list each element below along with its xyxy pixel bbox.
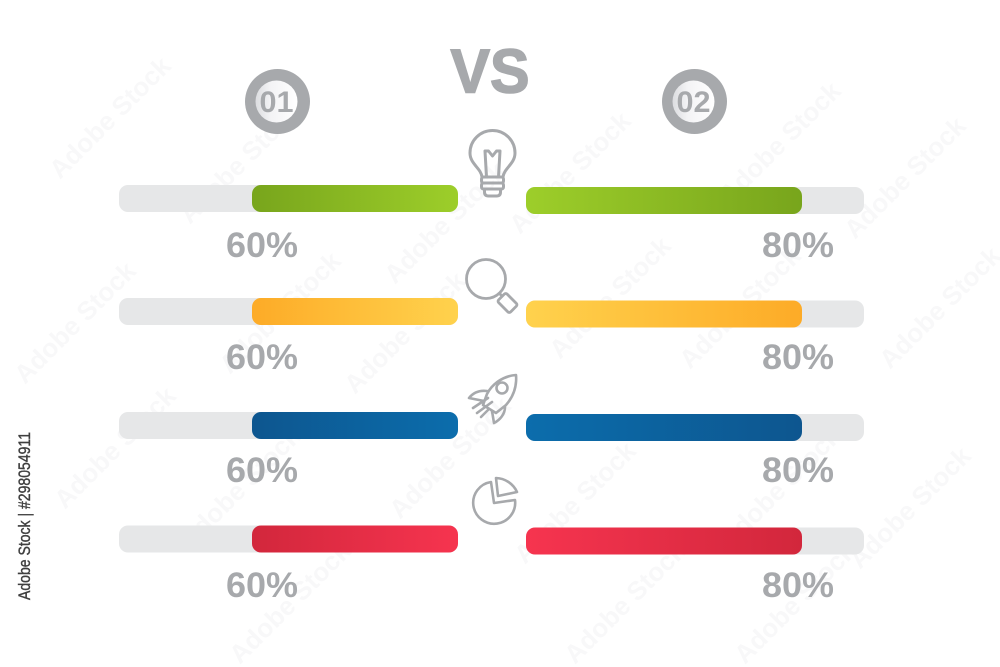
bar row 2 left: orange 60%: 60% — [226, 338, 298, 377]
title: VS: VS — [450, 38, 530, 106]
bar row 1 left: green 60% — [119, 185, 458, 265]
badge: 01: 01 — [260, 86, 294, 119]
watermark: stock pattern: Adobe Stock — [713, 75, 847, 209]
bar row 4 right: red 80%: 80% — [762, 566, 834, 605]
watermark: stock pattern: Adobe Stock — [8, 255, 142, 389]
bar row 4 left: red 60% — [119, 526, 458, 605]
bar row 1 left: green 60%: 60% — [226, 226, 298, 265]
watermark: stock pattern: Adobe Stock — [173, 95, 307, 229]
watermark: stock pattern: Adobe Stock — [728, 535, 862, 667]
watermark: stock pattern: Adobe Stock — [383, 390, 517, 524]
watermark: stock pattern: Adobe Stock — [378, 155, 512, 289]
icon: light bulb — [470, 130, 515, 196]
bar row 4 right: red 80% — [526, 528, 864, 605]
watermark: stock pattern: Adobe Stock — [843, 440, 977, 574]
badge: 01 — [245, 69, 310, 134]
watermark: stock pattern: Adobe Stock — [838, 110, 972, 244]
bar row 2 right: orange 80% — [526, 300, 864, 377]
watermark: stock pattern: Adobe Stock — [48, 380, 182, 514]
watermark: stock pattern: Adobe Stock — [673, 240, 807, 374]
icon: rocket — [469, 375, 516, 423]
bar row 2 right: orange 80%: 80% — [762, 338, 834, 377]
watermark: stock pattern: Adobe Stock — [508, 435, 642, 569]
bar row 1 right: green 80% — [526, 187, 864, 265]
watermark: stock pattern: Adobe Stock — [713, 420, 847, 554]
icon: pie chart — [473, 478, 517, 524]
icon: magnifying glass — [466, 260, 518, 313]
watermark: stock pattern: Adobe Stock — [543, 230, 677, 364]
bar row 3 right: blue 80%: 80% — [762, 451, 834, 490]
badge: 02 — [662, 69, 727, 134]
bar row 3 left: blue 60%: 60% — [226, 451, 298, 490]
watermark: stock pattern: Adobe Stock — [43, 50, 177, 184]
watermark: stock pattern: Adobe Stock — [558, 535, 692, 667]
watermark: stock pattern: Adobe Stock — [173, 420, 307, 554]
bar row 1 right: green 80%: 80% — [762, 226, 834, 265]
badge: 02: 02 — [676, 86, 710, 119]
watermark: stock pattern: Adobe Stock — [223, 535, 357, 667]
watermark: stock pattern: Adobe Stock — [213, 245, 347, 379]
bar row 2 left: orange 60% — [119, 298, 458, 377]
watermark: stock pattern: Adobe Stock — [338, 265, 472, 399]
bar row 3 right: blue 80% — [526, 414, 864, 490]
watermark: stock pattern: Adobe Stock — [503, 105, 637, 239]
stock id caption: Adobe Stock | #298054911 — [15, 432, 34, 600]
bar row 3 left: blue 60% — [119, 412, 458, 490]
bar row 4 left: red 60%: 60% — [226, 566, 298, 605]
